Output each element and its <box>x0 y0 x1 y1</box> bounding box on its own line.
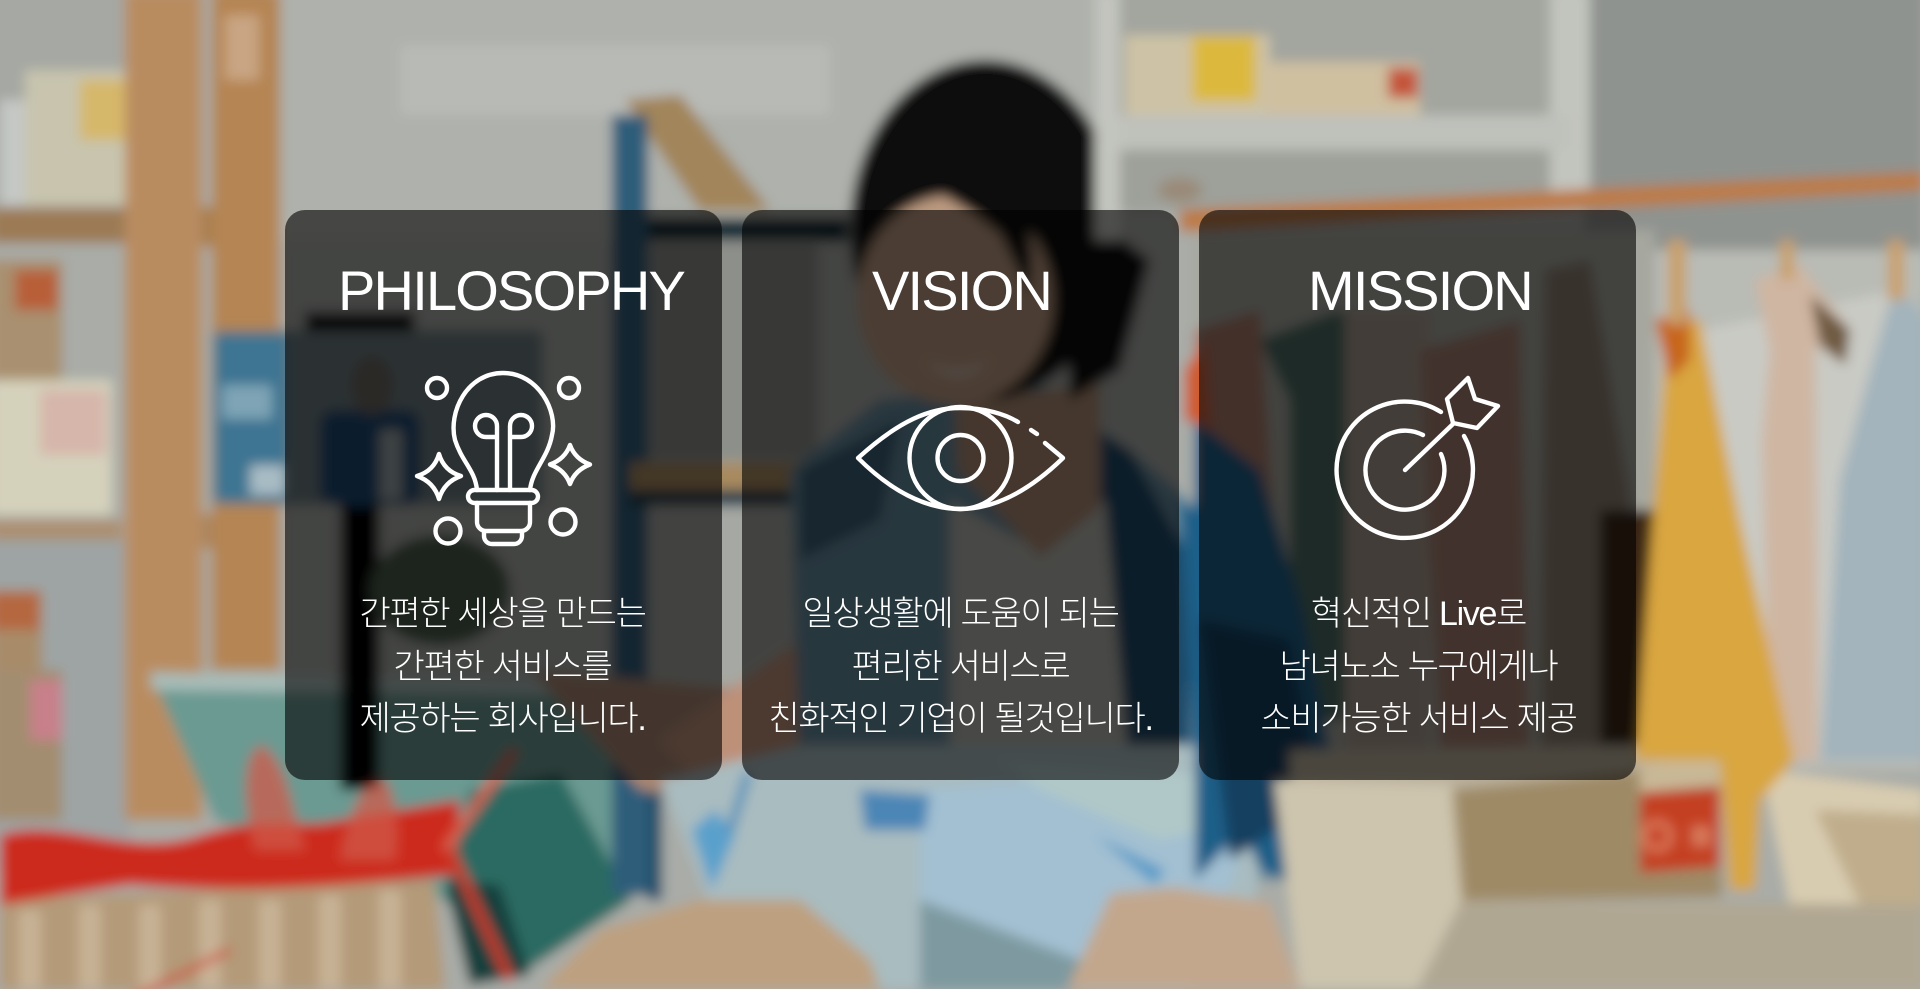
panel: mission <box>1199 210 1636 780</box>
text: vision description <box>768 595 1153 738</box>
arm <box>530 670 850 820</box>
shelf unit <box>1095 0 1121 240</box>
hair and face <box>850 60 1120 400</box>
jacket <box>790 385 1320 880</box>
tee and neck <box>950 500 1130 780</box>
blue rack <box>625 95 770 210</box>
heading: vision: VISION <box>872 259 1051 322</box>
boxes right <box>1290 745 1730 790</box>
tripod <box>340 505 380 790</box>
text: philosophy description: 간편한 세상을 만드는 <box>359 595 646 633</box>
panel: philosophy <box>285 210 722 780</box>
heading: philosophy: PHILOSOPHY <box>338 259 684 322</box>
jacket bright overlap at mission panel <box>1195 420 1340 880</box>
text: mission description: 남녀노소 누구에게나 <box>1280 648 1557 686</box>
text: mission description: 소비가능한 서비스 제공 <box>1260 700 1577 738</box>
package <box>660 745 1260 989</box>
yarn left <box>540 900 880 989</box>
yarn right <box>1067 887 1300 989</box>
icon: eye <box>856 404 1066 512</box>
red ribbon and basket <box>0 880 445 989</box>
right clothes <box>1655 250 1920 770</box>
tablet <box>150 672 631 975</box>
text: philosophy description: 간편한 서비스를 <box>393 648 612 686</box>
icon: light bulb <box>414 370 592 546</box>
text: mission description <box>1260 595 1577 738</box>
text: philosophy description <box>359 595 646 738</box>
text: philosophy description: 제공하는 회사입니다. <box>359 700 646 738</box>
text: mission description: 혁신적인 Live로 <box>1311 595 1526 633</box>
left lower wall <box>0 540 130 870</box>
clothes <box>1195 230 1655 760</box>
phone <box>213 330 543 505</box>
rail <box>1180 172 1920 232</box>
left boxes <box>0 100 28 205</box>
heading: mission: MISSION <box>1308 259 1532 322</box>
wood shelving <box>0 208 125 243</box>
text: vision description: 친화적인 기업이 될것입니다. <box>768 700 1153 738</box>
text: vision description: 일상생활에 도움이 되는 <box>802 595 1119 633</box>
icon: target with arrow <box>1334 376 1500 540</box>
panel: vision <box>742 210 1179 780</box>
yellow apron <box>1635 320 1794 890</box>
text: vision description: 편리한 서비스로 <box>851 648 1070 686</box>
